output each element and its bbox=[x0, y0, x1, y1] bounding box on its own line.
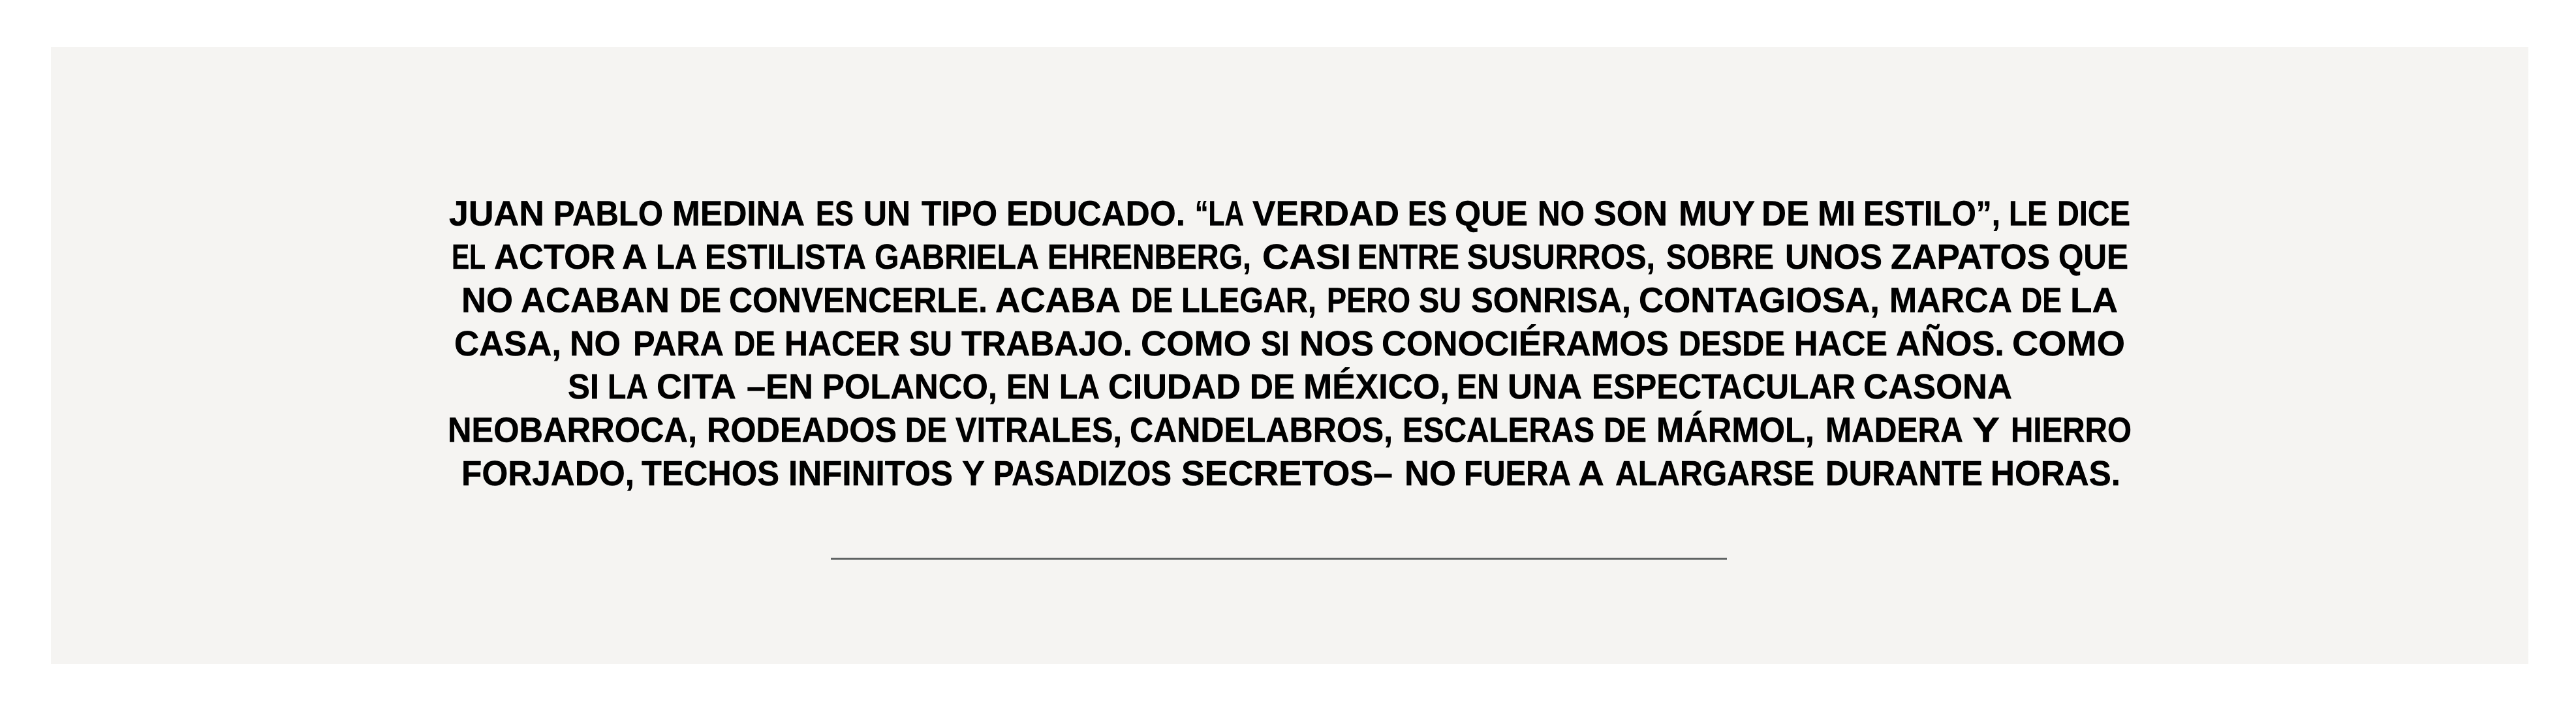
text line 7: PASADIZOS bbox=[993, 455, 1172, 493]
text line 3: ACABAN bbox=[521, 282, 670, 320]
text line 6: MÁRMOL, bbox=[1656, 411, 1814, 450]
text line 3: CONVENCERLE. bbox=[729, 282, 987, 320]
text line 7: INFINITOS bbox=[788, 455, 953, 493]
text line 1: QUE bbox=[1455, 194, 1528, 234]
text line 4 bbox=[454, 324, 2125, 363]
text line 3: ACABA bbox=[995, 282, 1121, 320]
text line 7: A bbox=[1578, 455, 1604, 493]
text line 6: HIERRO bbox=[2011, 411, 2132, 450]
text line 6: VITRALES, bbox=[955, 411, 1122, 450]
text line 1: “LA bbox=[1195, 194, 1244, 234]
text line 4: SU bbox=[909, 325, 952, 363]
text line 5: UNA bbox=[1508, 368, 1582, 406]
text line 1: ESTILO”, bbox=[1863, 194, 2000, 234]
text line 3: LLEGAR, bbox=[1181, 282, 1316, 320]
text line 6: ESCALERAS bbox=[1403, 411, 1594, 450]
text line 1: MEDINA bbox=[672, 194, 805, 234]
text line 1: TIPO bbox=[922, 194, 997, 234]
text line 3: CONTAGIOSA, bbox=[1639, 282, 1880, 320]
text line 1: SON bbox=[1594, 194, 1668, 234]
text line 3: SU bbox=[1419, 282, 1461, 320]
text line 4: COMO bbox=[2012, 325, 2125, 363]
text line 3: SONRISA, bbox=[1471, 282, 1631, 320]
text line 4: CASA, bbox=[454, 325, 561, 363]
text line 2: LA bbox=[656, 238, 697, 277]
text line 7: TECHOS bbox=[642, 455, 779, 493]
text line 7: FORJADO, bbox=[461, 455, 634, 493]
text line 4: DE bbox=[734, 325, 775, 363]
text line 6 bbox=[448, 411, 2132, 450]
text line 6: MADERA bbox=[1825, 411, 1963, 450]
text line 2 bbox=[452, 238, 2128, 277]
text line 6: NEOBARROCA, bbox=[448, 411, 697, 450]
text line 7: NO bbox=[1404, 455, 1456, 493]
text line 3: PERO bbox=[1327, 282, 1410, 320]
text line 1: ES bbox=[816, 194, 854, 234]
text line 2: ZAPATOS bbox=[1891, 238, 2050, 277]
text line 5: CASONA bbox=[1863, 368, 2012, 406]
text line 5: SI bbox=[568, 368, 599, 406]
text line 7: HORAS. bbox=[1991, 455, 2120, 493]
text line 2: SOBRE bbox=[1666, 238, 1774, 277]
text line 4: HACE bbox=[1794, 325, 1887, 363]
text line 2: QUE bbox=[2058, 238, 2128, 277]
text line 1: DE bbox=[1761, 194, 1809, 234]
text line 4: PARA bbox=[633, 325, 724, 363]
text line 5: EN bbox=[1006, 368, 1050, 406]
text line 6: RODEADOS bbox=[707, 411, 897, 450]
text line 4: COMO bbox=[1141, 325, 1251, 363]
text line 1: UN bbox=[863, 194, 910, 234]
text line 1: EDUCADO. bbox=[1006, 194, 1185, 234]
text line 3 bbox=[461, 282, 2118, 320]
text line 3: DE bbox=[1131, 282, 1173, 320]
text line 5: ESPECTACULAR bbox=[1592, 368, 1855, 406]
text line 7: DURANTE bbox=[1825, 455, 1983, 493]
text line 1: NO bbox=[1538, 194, 1585, 234]
text line 5 bbox=[568, 367, 2012, 406]
text line 2: EHRENBERG, bbox=[1047, 238, 1251, 277]
text line 4: NO bbox=[570, 325, 621, 363]
text line 7: SECRETOS– bbox=[1181, 455, 1393, 493]
text line 5: CITA bbox=[657, 368, 736, 406]
text line 6: DE bbox=[1604, 411, 1647, 450]
text line 1 bbox=[449, 194, 2130, 234]
text line 2: ENTRE bbox=[1358, 238, 1459, 277]
text line 3: NO bbox=[461, 282, 513, 320]
text line 3: DE bbox=[2021, 282, 2062, 320]
text line 2: UNOS bbox=[1785, 238, 1882, 277]
text line 1: DICE bbox=[2057, 194, 2130, 234]
text line 4: CONOCIÉRAMOS bbox=[1382, 324, 1669, 363]
text line 4: HACER bbox=[784, 325, 900, 363]
text line 4: SI bbox=[1261, 325, 1290, 363]
text line 3: DE bbox=[679, 282, 721, 320]
text line 5: LA bbox=[1059, 368, 1100, 406]
text line 5: CIUDAD bbox=[1108, 368, 1241, 406]
text line 6: Y bbox=[1972, 411, 2000, 450]
text line 2: SUSURROS, bbox=[1467, 238, 1655, 277]
text line 6: DE bbox=[905, 411, 947, 450]
text line 2: EL bbox=[452, 238, 486, 277]
text line 7 bbox=[461, 455, 2120, 493]
text line 1: PABLO bbox=[553, 194, 663, 234]
text line 2: ACTOR bbox=[494, 238, 615, 277]
text block: introduction paragraph bbox=[448, 194, 2132, 493]
text line 1: MUY bbox=[1679, 194, 1755, 234]
text line 7: FUERA bbox=[1464, 455, 1571, 493]
text line 3: LA bbox=[2070, 282, 2118, 320]
text line 5: EN bbox=[1457, 368, 1499, 406]
text line 5: DE bbox=[1250, 368, 1295, 406]
text line 1: ES bbox=[1408, 194, 1447, 234]
text line 4: NOS bbox=[1299, 325, 1374, 363]
text line 2: ESTILISTA bbox=[705, 238, 866, 277]
text line 1: MI bbox=[1818, 194, 1855, 234]
text line 1: VERDAD bbox=[1252, 194, 1399, 234]
text line 3: MARCA bbox=[1889, 282, 2012, 320]
text line 5: –EN bbox=[747, 368, 813, 406]
text line 2: CASI bbox=[1262, 238, 1351, 277]
text line 5: MÉXICO, bbox=[1303, 367, 1450, 406]
text line 4: AÑOS. bbox=[1896, 324, 2004, 363]
text line 1: LE bbox=[2009, 194, 2047, 234]
text line 6: CANDELABROS, bbox=[1130, 411, 1393, 450]
text line 5: POLANCO, bbox=[822, 368, 997, 406]
text line 7: Y bbox=[962, 455, 985, 493]
text line 7: ALARGARSE bbox=[1615, 455, 1814, 493]
text line 1: JUAN bbox=[449, 194, 544, 234]
text line 2: GABRIELA bbox=[875, 238, 1039, 277]
text line 5: LA bbox=[608, 368, 648, 406]
text line 4: DESDE bbox=[1679, 325, 1785, 363]
text line 4: TRABAJO. bbox=[961, 325, 1132, 363]
horizontal rule bbox=[831, 558, 1727, 560]
text line 2: A bbox=[622, 238, 647, 277]
